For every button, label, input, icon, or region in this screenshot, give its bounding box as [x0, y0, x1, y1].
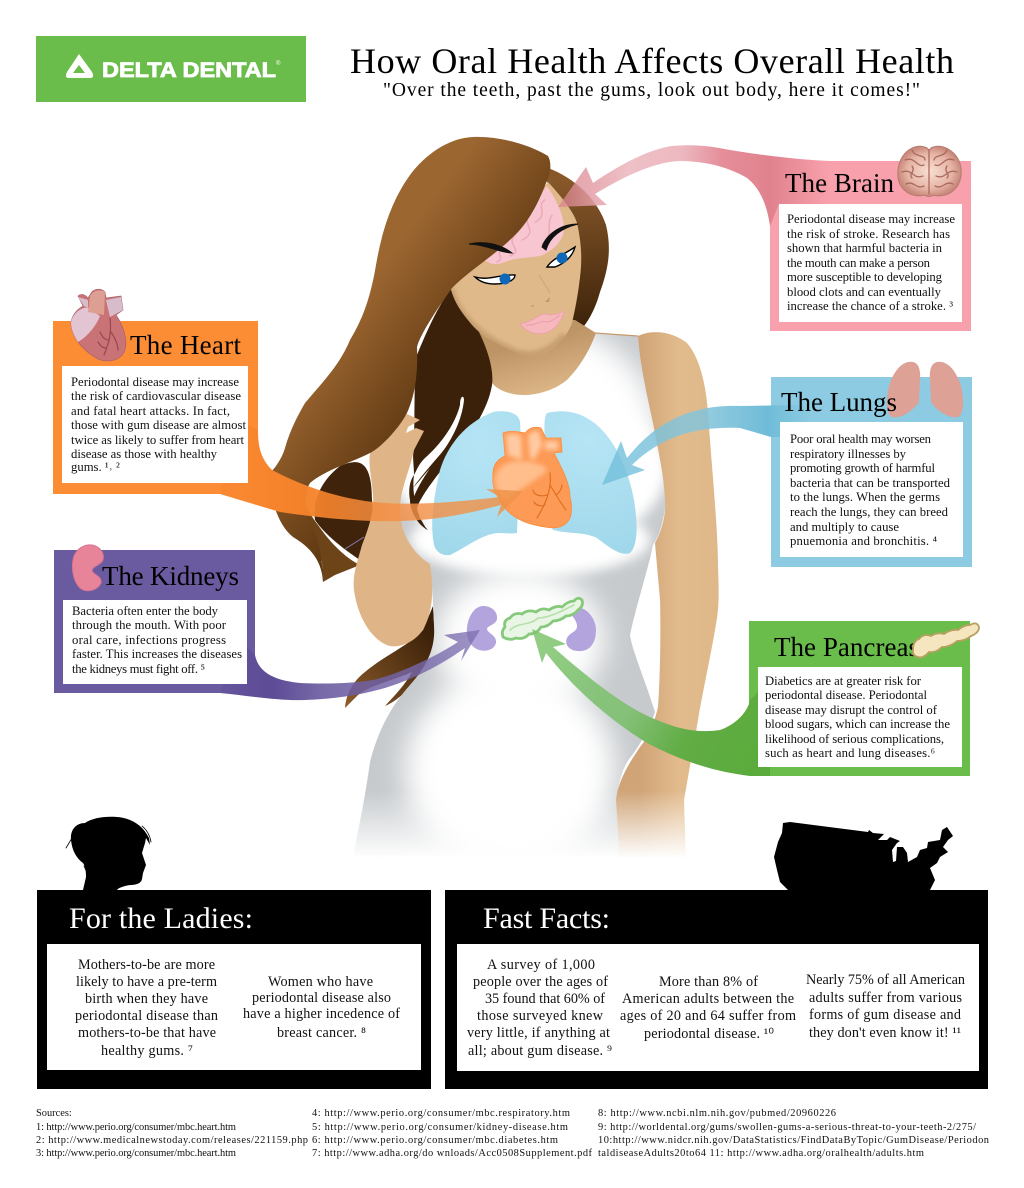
text: breast cancer: have a higher incedence of: [243, 1006, 400, 1022]
text: heart: disease as those with healthy: [71, 447, 218, 461]
organ: lungs: [432, 411, 637, 555]
text: brain: the risk of stroke. Research has: [787, 227, 950, 241]
text: 75% fact: forms of gum disease and: [809, 1007, 961, 1023]
text: survey fact: people over the ages of: [473, 974, 608, 990]
text: survey fact: very little, if anything at: [467, 1025, 610, 1041]
icon: lungs: [887, 362, 963, 417]
text: pancreas: disease may disrupt the control of: [765, 703, 938, 717]
text: mothers-to-be: birth when they have: [85, 991, 208, 1007]
text: kidneys: faster. This increases the diseases: [72, 647, 242, 661]
arrow: to brain: [558, 145, 830, 226]
organ: pancreas: [502, 598, 582, 639]
arrow: to kidneys: [220, 630, 480, 700]
text: kidneys: [72, 604, 242, 676]
text: sources: 10:http://www.nidcr.nih.gov/DataStatistics/FindDataByTopic/GumDisease/Periodon: [598, 1135, 990, 1146]
panel: for the ladies: [37, 890, 431, 1089]
text: brain: the mouth can make a person: [787, 256, 931, 270]
text: lungs: reach the lungs, they can breed: [790, 505, 949, 519]
text: sources: [36, 1108, 990, 1159]
icon: woman silhouette: [66, 817, 151, 890]
heading: for the ladies: For the Ladies:: [69, 902, 253, 935]
stray purple line: [345, 537, 364, 549]
text: sources: Sources:: [36, 1108, 72, 1119]
title: How Oral Health Affects Overall Health: [350, 41, 954, 81]
text: 8% fact: [620, 974, 796, 1042]
text: sources: 2: http://www.medicalnewstoday.com/releases/221159.php: [36, 1135, 308, 1146]
text: lungs: promoting growth of harmful: [790, 461, 935, 475]
text: survey fact: all; about gum disease. ⁹: [468, 1043, 612, 1059]
organ: kidneys: [467, 606, 596, 651]
panel: the pancreas: [749, 621, 979, 776]
panel: the kidneys: [54, 545, 255, 693]
text: heart: Periodontal disease may increase: [71, 375, 239, 389]
text: breast cancer: Women who have: [268, 974, 373, 990]
text: brain: more susceptible to developing: [787, 270, 943, 284]
logo: Delta Dental: DELTA DENTAL: [102, 59, 276, 82]
text: survey fact: [467, 957, 612, 1059]
text: sources: 7: http://www.adha.org/do wnloads/Acc0508Supplement.pdf: [312, 1148, 593, 1159]
right arm: [616, 332, 719, 862]
heading: the pancreas: The Pancreas: [774, 632, 919, 662]
text: pancreas: likelihood of serious complications,: [765, 732, 944, 746]
icon: brain: [898, 146, 961, 196]
text: 75% fact: [806, 972, 965, 1041]
text: sources: 1: http://www.perio.org/consumer/mbc.heart.htm: [36, 1122, 236, 1133]
text: survey fact: those surveyed knew: [477, 1008, 604, 1024]
hair: strands over top: [409, 430, 460, 530]
hair: right side: [547, 168, 609, 331]
face: [450, 182, 581, 356]
nose: [539, 275, 550, 293]
panel background: the heart: [53, 321, 258, 494]
bottom fade: [340, 790, 720, 866]
organ: heart: [493, 427, 572, 528]
panel background: the kidneys: [54, 550, 255, 693]
text: lungs: and multiply to cause: [790, 520, 899, 534]
panel background: the lungs: [771, 377, 972, 567]
text: 8% fact: More than 8% of: [659, 974, 758, 990]
text: lungs: [790, 432, 951, 548]
logo: Delta Dental: [36, 36, 306, 102]
heading: the kidneys: The Kidneys: [102, 561, 239, 591]
text: survey fact: A survey of 1,000: [487, 957, 595, 973]
eyes: [475, 247, 575, 284]
text: breast cancer: breast cancer. ⁸: [277, 1025, 366, 1041]
text: sources: 5: http://www.perio.org/consumer/kidney-disease.htm: [312, 1122, 568, 1133]
torso: white top: [355, 334, 666, 848]
text: heart: and fatal heart attacks. In fact,: [71, 404, 230, 418]
icon: USA map silhouette: [774, 822, 953, 890]
left arm and hand: [354, 414, 432, 646]
text: heart: those with gum disease are almost: [71, 418, 246, 432]
text: heart: [71, 375, 246, 474]
hair: dark back layer: [412, 288, 492, 530]
text: survey fact: 35 found that 60% of: [485, 991, 605, 1007]
text: brain: increase the chance of a stroke. ³: [787, 299, 953, 313]
text: lungs: Poor oral health may worsen: [790, 432, 932, 446]
text: kidneys: Bacteria often enter the body: [72, 604, 219, 618]
text: 8% fact: American adults between the: [622, 991, 794, 1007]
text: mothers-to-be: mothers-to-be that have: [78, 1025, 216, 1041]
panel: the lungs: [771, 362, 972, 567]
icon: heart: [71, 289, 126, 361]
text: lungs: bacteria that can be transported: [790, 476, 951, 490]
text: sources: 8: http://www.ncbi.nlm.nih.gov/pubmed/20960226: [598, 1108, 836, 1119]
text: pancreas: Diabetics are at greater risk for: [765, 674, 922, 688]
logo: Delta Dental: ®: [276, 60, 281, 67]
text: mothers-to-be: healthy gums. ⁷: [101, 1043, 193, 1059]
text: pancreas: [765, 674, 950, 760]
text: 75% fact: Nearly 75% of all American: [806, 972, 965, 988]
panel background: the pancreas: [749, 621, 970, 776]
heading: the heart: The Heart: [130, 330, 241, 360]
text: mothers-to-be: [75, 957, 218, 1059]
text: brain: Periodontal disease may increase: [787, 212, 955, 226]
text: heart: gums. ¹˒ ²: [71, 460, 120, 474]
text: brain: [787, 212, 955, 313]
hair lock behind arm: [345, 606, 435, 708]
text: pancreas: blood sugars, which can increase the: [765, 717, 950, 731]
text: heart: twice as likely to suffer from heart: [71, 433, 244, 447]
text: lungs: respiratory illnesses by: [790, 447, 907, 461]
text: kidneys: the kidneys must fight off. ⁵: [72, 662, 205, 676]
text: breast cancer: periodontal disease also: [252, 990, 391, 1006]
heading: the lungs: The Lungs: [781, 387, 897, 417]
text: brain: shown that harmful bacteria in: [787, 241, 943, 255]
panel background: the brain: [770, 161, 971, 331]
text: 75% fact: they don't even know it! ¹¹: [809, 1025, 961, 1041]
text: sources: 9: http://worldental.org/gums/swollen-gums-a-serious-threat-to-your-teeth-2/275/: [598, 1122, 976, 1133]
text: mothers-to-be: Mothers-to-be are more: [78, 957, 215, 973]
text: 8% fact: ages of 20 and 64 suffer from: [620, 1008, 796, 1024]
arrow: to heart: [220, 420, 523, 521]
eyebrows: [469, 243, 512, 253]
text: kidneys: oral care, infections progress: [72, 633, 226, 647]
panel: fast facts: [445, 890, 988, 1089]
text: breast cancer: [243, 974, 400, 1041]
text: lungs: to the lungs. When the germs: [790, 490, 940, 504]
icon: pancreas: [913, 623, 979, 657]
heading: fast facts: Fast Facts:: [483, 902, 610, 935]
subtitle: "Over the teeth, past the gums, look out body, here it comes!": [383, 80, 920, 101]
panel: the brain: [770, 146, 971, 331]
text: mothers-to-be: periodontal disease than: [75, 1008, 218, 1024]
text: sources: taldiseaseAdults20to64 11: http://www.adha.org/oralhealth/adults.htm: [598, 1148, 924, 1159]
arrow: to pancreas: [532, 629, 770, 776]
text: pancreas: periodontal disease. Periodontal: [765, 688, 927, 702]
heading: the brain: The Brain: [785, 168, 894, 198]
text: lungs: pnuemonia and bronchitis. ⁴: [790, 534, 938, 548]
arrow: to lungs: [602, 405, 810, 485]
icon: kidney: [72, 545, 103, 591]
text: sources: 6: http://www.perio.org/consumer/mbc.diabetes.htm: [312, 1135, 558, 1146]
text: mothers-to-be: likely to have a pre-term: [76, 974, 217, 990]
lips: [520, 311, 564, 334]
panel: the heart: [53, 289, 258, 494]
text: 75% fact: adults suffer from various: [809, 990, 962, 1006]
neck: [466, 315, 596, 395]
text: sources: 3: http://www.perio.org/consumer/mbc.heart.htm: [36, 1148, 236, 1159]
brain on forehead: [482, 186, 564, 264]
text: brain: blood clots and can eventually: [787, 285, 942, 299]
illustration: woman: [270, 137, 720, 870]
text: sources: 4: http://www.perio.org/consumer/mbc.respiratory.htm: [312, 1108, 570, 1119]
text: kidneys: through the mouth. With poor: [72, 618, 227, 632]
text: pancreas: such as heart and lung diseases.⁶: [765, 746, 935, 760]
text: 8% fact: periodontal disease. ¹⁰: [644, 1026, 774, 1042]
hair: main front sweep: [270, 137, 550, 582]
text: heart: the risk of cardiovascular disease: [71, 389, 241, 403]
